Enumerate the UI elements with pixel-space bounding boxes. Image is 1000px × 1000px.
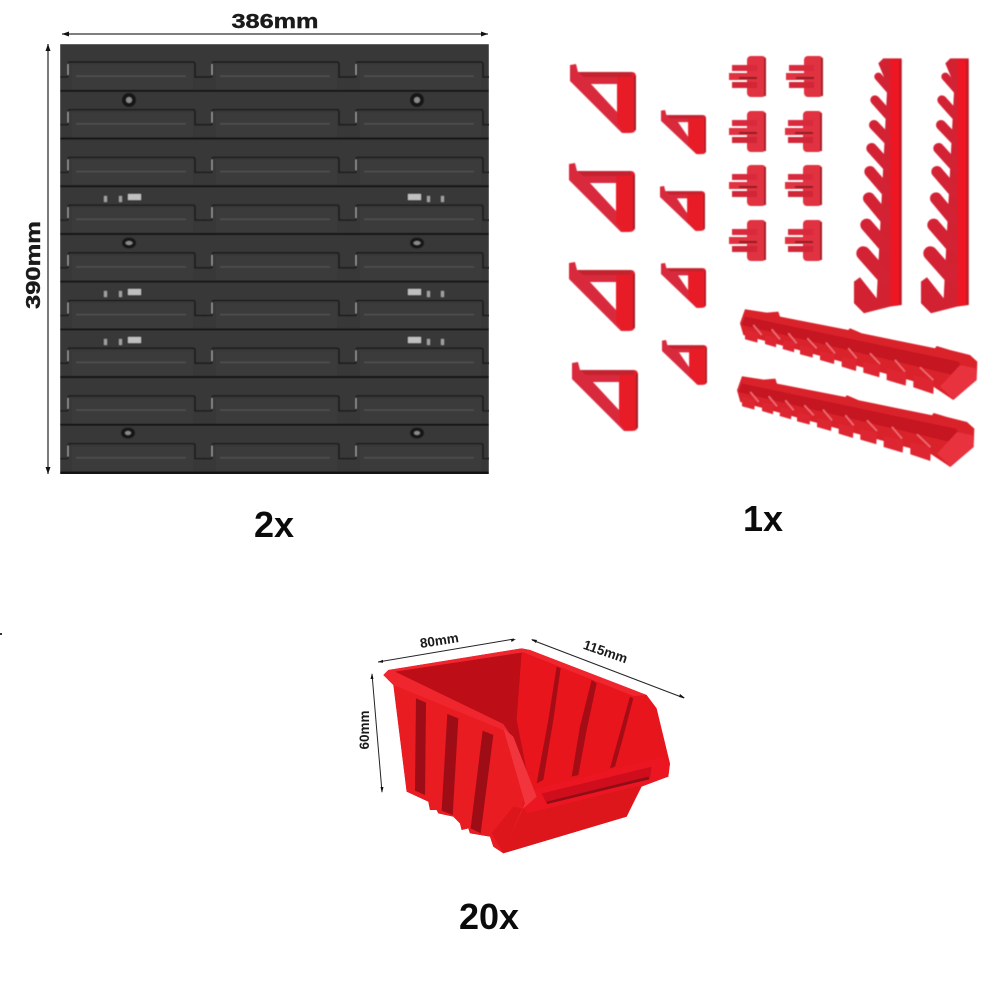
dimension: 60mm — [357, 673, 384, 793]
front lower face — [492, 783, 642, 853]
side wall ribs — [415, 698, 493, 833]
slanted front edge — [503, 728, 537, 853]
label rim — [522, 757, 670, 813]
red tool clips — [729, 56, 823, 261]
stray dot — [0, 633, 2, 635]
panel height dimension: 390mm — [23, 221, 45, 309]
side wall — [393, 683, 525, 853]
large red brackets — [569, 64, 638, 431]
red storage bin — [383, 648, 670, 853]
vertical wrench holders — [854, 58, 969, 313]
bin right interior wall — [517, 652, 663, 790]
bin back interior — [393, 652, 530, 788]
label: 1x: 1x — [743, 498, 783, 539]
top rim — [383, 648, 647, 737]
dimension: 60mm: 60mm — [357, 710, 372, 750]
label: 2x: 2x — [254, 504, 294, 545]
bin silhouette — [383, 648, 670, 853]
panel: black wall board — [60, 44, 493, 475]
small red brackets — [660, 110, 707, 385]
interior ribs — [537, 667, 633, 783]
dimension: 115mm: 115mm — [581, 637, 630, 666]
dimension: 80mm — [378, 630, 516, 663]
label: 20x: 20x — [459, 896, 519, 937]
dimension: 80mm: 80mm — [419, 630, 460, 651]
panel height dimension — [23, 44, 50, 474]
dimension: 115mm — [531, 637, 685, 698]
panel width dimension — [62, 11, 488, 36]
panel width dimension: 386mm — [232, 11, 318, 33]
horizontal wrench holders — [737, 309, 977, 467]
